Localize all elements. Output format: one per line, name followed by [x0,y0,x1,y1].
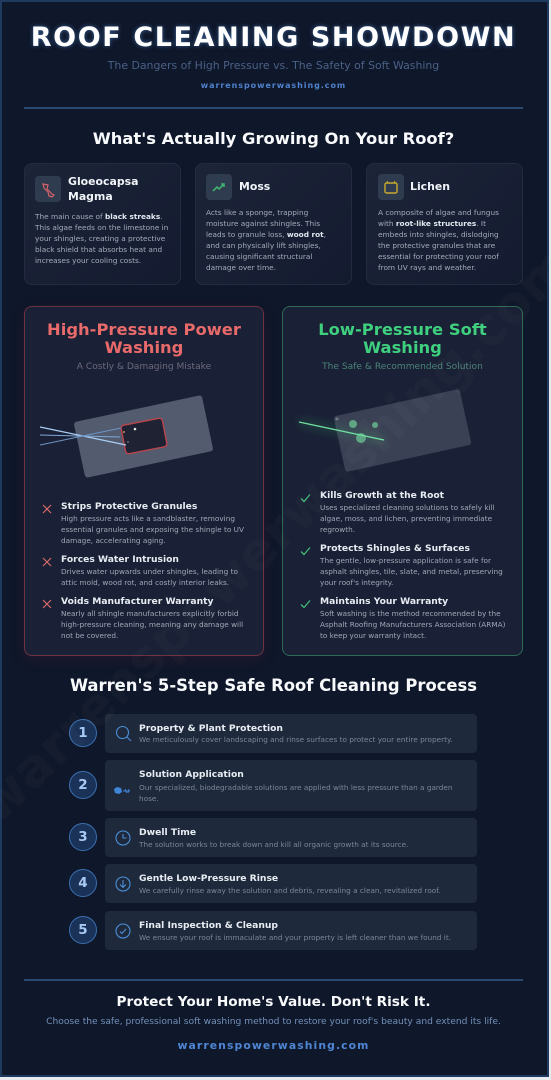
step title: Dwell Time [139,826,196,838]
step title: Solution Application [139,769,244,780]
item text: algae, moss, and lichen, preventing immediate [320,514,492,522]
step title: Property & Plant Protection [139,723,283,734]
list item: kills growth [300,490,495,534]
card body: embeds into shingles, dislodging [378,230,499,239]
card title: Lichen [410,180,450,193]
list item: strips granules [42,501,244,544]
list item: protects shingles [300,543,503,586]
step number [69,718,97,746]
panel heading: Washing [363,338,442,357]
item text [61,608,243,640]
item text: attic mold, wood rot, and costly interior leaks. [61,578,229,586]
panel heading [47,320,241,357]
card body: and can physically lift shingles, [206,241,321,250]
header divider [24,107,523,108]
item heading: Forces Water Intrusion [61,554,179,565]
icon: check [300,600,310,608]
card body: A composite of algae and fungus [378,208,499,217]
icon: down arrow [115,876,130,892]
card body: leads to granule loss, wood rot, [206,230,326,239]
illustration: pressure jets damaging shingle [40,396,213,478]
step 2 [69,760,477,811]
step text: We carefully rinse away the solution and debris, revealing a clean, revitalized roof. [139,886,441,895]
item text: essential granules and exposing the shingle to UV [61,524,244,534]
step number: 3 [78,828,88,844]
card body: This algae feeds on the limestone in [35,223,168,232]
icon: check [300,547,310,556]
item text: regrowth. [320,524,355,534]
item heading: Kills Growth at the Root [320,490,444,501]
icon: cross [42,558,52,566]
card body [35,212,168,265]
title: ROOF CLEANING SHOWDOWN [31,22,516,53]
step number: 1 [78,724,88,740]
step number [69,869,97,897]
item text: Nearly all shingle manufacturers explicitly forbid [61,608,239,618]
step title: Gentle Low-Pressure Rinse [139,873,278,884]
item heading: Voids Manufacturer Warranty [61,596,213,607]
heading: what's growing: What's Actually Growing On Your Roof? [93,129,454,148]
item heading: Strips Protective Granules [61,501,197,512]
step text: The solution works to break down and kill all organic growth at its source. [139,840,408,848]
step text [139,782,453,802]
icon: lichen [378,174,404,200]
list item: water intrusion [42,554,238,586]
card body: causing significant structural [206,252,312,261]
step box [105,818,477,857]
footer website link: warrenspowerwashing.com [177,1039,370,1052]
item text: high-pressure cleaning, meaning any damage will [61,620,243,628]
item heading: Maintains Your Warranty [320,596,448,607]
step number: 5 [78,922,88,938]
footer heading: Protect Your Home's Value. Don't Risk It. [116,994,431,1010]
panel heading: Washing [105,338,183,357]
card: Gloeocapsa Magma [24,163,181,285]
panel: high-pressure power washing [24,306,264,656]
card body: from UV rays and weather. [378,263,476,272]
card body: the protective granules that are [378,241,495,250]
icon: algae [35,176,61,202]
item text: Soft washing is the method recommended by the [320,608,501,618]
item text [320,608,506,640]
illustration: gentle spray on shingle [298,390,471,472]
item text: not be covered. [61,630,118,640]
card body: your shingles, creating a protective [35,234,165,243]
icon: magnifier [116,726,132,742]
panel heading [318,320,487,357]
step text: We ensure your roof is immaculate and your property is left cleaner than we found it. [139,933,451,942]
step 3 [69,818,477,857]
icon: clock [115,830,130,846]
step title: Final Inspection & Cleanup [139,920,278,931]
footer text: Choose the safe, professional soft washing method to restore your roof's beauty and extend its life. [46,1017,501,1027]
card title: Magma [68,190,113,202]
item text: damage, accelerating aging. [61,536,166,544]
icon: cross [42,504,52,514]
card body: increases your cooling costs. [35,256,141,265]
step 4 [69,864,477,903]
item text: Asphalt Roofing Manufacturers Association (ARMA) [320,620,506,628]
step box [105,864,477,903]
step number [69,916,97,944]
step box [105,714,477,753]
item text [320,502,495,534]
item text: your roof's integrity. [320,578,393,586]
card body: Acts like a sponge, trapping [206,208,308,217]
step box [105,911,477,950]
step number [69,771,97,799]
panel: low-pressure soft washing [282,306,523,656]
subtitle: The Dangers of High Pressure vs. The Safety of Soft Washing [108,59,439,72]
card title [68,175,138,202]
item text: asphalt shingles, tile, slate, and metal, preserving [320,566,503,576]
card body: moisture against shingles. This [206,219,320,228]
card body [378,208,499,272]
step 1 [69,714,477,753]
heading: 5-step process: Warren's 5-Step Safe Roof Cleaning Process [70,676,477,695]
item text [61,514,244,544]
item text: to keep your warranty intact. [320,630,426,640]
card body: The main cause of black streaks. [35,212,163,221]
panel subheading: The Safe & Recommended Solution [322,362,483,372]
card body: with root-like structures. It [378,219,486,228]
step text: We meticulously cover landscaping and rinse surfaces to protect your entire property. [139,735,453,744]
panel heading: Low-Pressure Soft [318,320,487,339]
item text [61,566,238,586]
footer divider [24,979,523,980]
item text: Uses specialized cleaning solutions to safely kill [320,502,495,512]
step number [69,822,97,850]
item text: High pressure acts like a sandblaster, removing [61,514,235,522]
icon: check [300,494,310,502]
icon: moss [206,174,232,200]
card title: Gloeocapsa [68,175,138,188]
icon: cross [42,600,52,608]
card body: black shield that absorbs heat and [35,245,162,254]
item text [320,556,503,586]
step box [105,760,477,811]
card body [206,208,326,272]
step 5 [69,911,477,950]
item text: The gentle, low-pressure application is safe for [320,556,491,564]
card body: damage over time. [206,263,276,272]
step text: Our specialized, biodegradable solutions are applied with less pressure than a garden [139,782,453,792]
card title: Moss [239,180,270,193]
panel heading: High-Pressure Power [47,320,241,339]
item text: Drives water upwards under shingles, leading to [61,566,238,576]
step number: 2 [78,777,88,793]
card: Moss [195,163,352,285]
card: Lichen [366,163,523,285]
icon: check circle [115,924,130,938]
list item: maintains warranty [300,596,506,640]
header website link: warrenspowerwashing.com [201,81,346,90]
panel subheading: A Costly & Damaging Mistake [77,362,211,372]
list item: voids warranty [42,596,243,640]
step text: hose. [139,794,159,802]
card body: essential for protecting your roof [378,252,499,261]
icon: spray [114,787,130,794]
step number: 4 [78,875,88,891]
item heading: Protects Shingles & Surfaces [320,543,470,554]
